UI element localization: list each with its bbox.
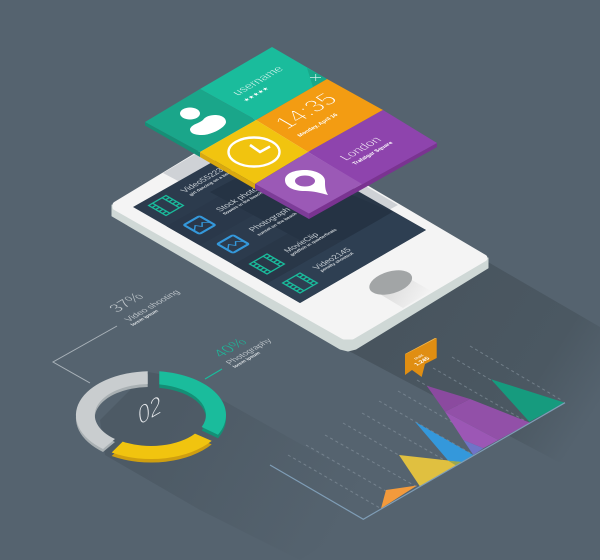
home button	[367, 266, 415, 299]
row 4 text: MovieClip	[282, 231, 321, 254]
row 2 text: Stock photo	[213, 185, 261, 213]
donut centre number: 02	[135, 391, 165, 431]
label: 40% photography: lorem ipsum	[232, 351, 263, 369]
green area	[491, 379, 565, 422]
axes	[270, 403, 565, 519]
phone long shadow	[347, 262, 600, 484]
screen	[133, 135, 426, 303]
teal segment	[159, 371, 226, 438]
floating tile menu	[145, 47, 437, 219]
row 3 text: Photograph	[246, 206, 293, 233]
clock time: 14:35	[269, 89, 344, 133]
tile: location	[255, 110, 437, 214]
label: 37% video shooting: Video shooting	[122, 288, 182, 323]
gray segment	[76, 371, 148, 452]
label: 40% photography: Photography	[223, 336, 274, 366]
row 5 film icon	[283, 273, 317, 293]
callout lines	[53, 326, 222, 383]
max marker: max	[413, 353, 426, 361]
donut chart	[76, 371, 226, 463]
label: 37% video shooting: 37%	[106, 290, 148, 315]
date: Monday, April 16	[297, 113, 340, 138]
list rows	[149, 166, 355, 293]
username text: username	[228, 64, 287, 98]
tile: username	[145, 47, 327, 152]
phone face	[116, 122, 484, 336]
button shadow on phone	[378, 276, 431, 308]
tile: time	[256, 79, 383, 152]
row 1 text: Video55223	[178, 166, 226, 194]
max marker	[405, 338, 437, 377]
dashed grid	[288, 346, 563, 508]
place text: Trafalgar Square	[352, 141, 395, 166]
row 1 text: girl dancing on a beach	[188, 168, 236, 197]
donut long shadow	[100, 372, 400, 560]
orange area	[381, 486, 417, 508]
yellow area	[399, 455, 462, 486]
label: 40% photography: 40%	[210, 336, 252, 360]
yellow segment	[112, 434, 212, 463]
blue area	[415, 422, 473, 462]
purple area	[427, 386, 530, 455]
bezel shadow	[163, 120, 398, 212]
area chart	[270, 338, 565, 519]
row 4 film icon	[250, 254, 284, 274]
stars: ★★★★★	[242, 86, 271, 103]
row 1 film icon	[149, 196, 183, 216]
row 4 text: goldfish in quarterfinals	[289, 228, 338, 257]
row 2 text: flowers in the beach	[222, 191, 264, 216]
phone side edge	[112, 205, 488, 351]
tile: clock icon	[200, 120, 308, 184]
row 5 text: Video2145	[310, 246, 354, 271]
phone	[112, 120, 488, 351]
max marker: 1.245	[414, 356, 432, 367]
plus	[310, 74, 321, 81]
London text: London	[336, 135, 385, 163]
row 5 text: penalty shootout	[319, 251, 355, 273]
label: 37% video shooting: lorem ipsum	[130, 309, 161, 327]
row 3 text: sunset on the beach	[256, 212, 298, 237]
tile edges	[145, 122, 437, 219]
row 3 image icon	[217, 235, 249, 253]
icon: map pin	[285, 170, 328, 195]
row 2 image icon	[184, 216, 215, 234]
overlap sliver	[448, 461, 462, 466]
icon: person	[180, 108, 226, 135]
label: 40% photography	[210, 336, 274, 369]
